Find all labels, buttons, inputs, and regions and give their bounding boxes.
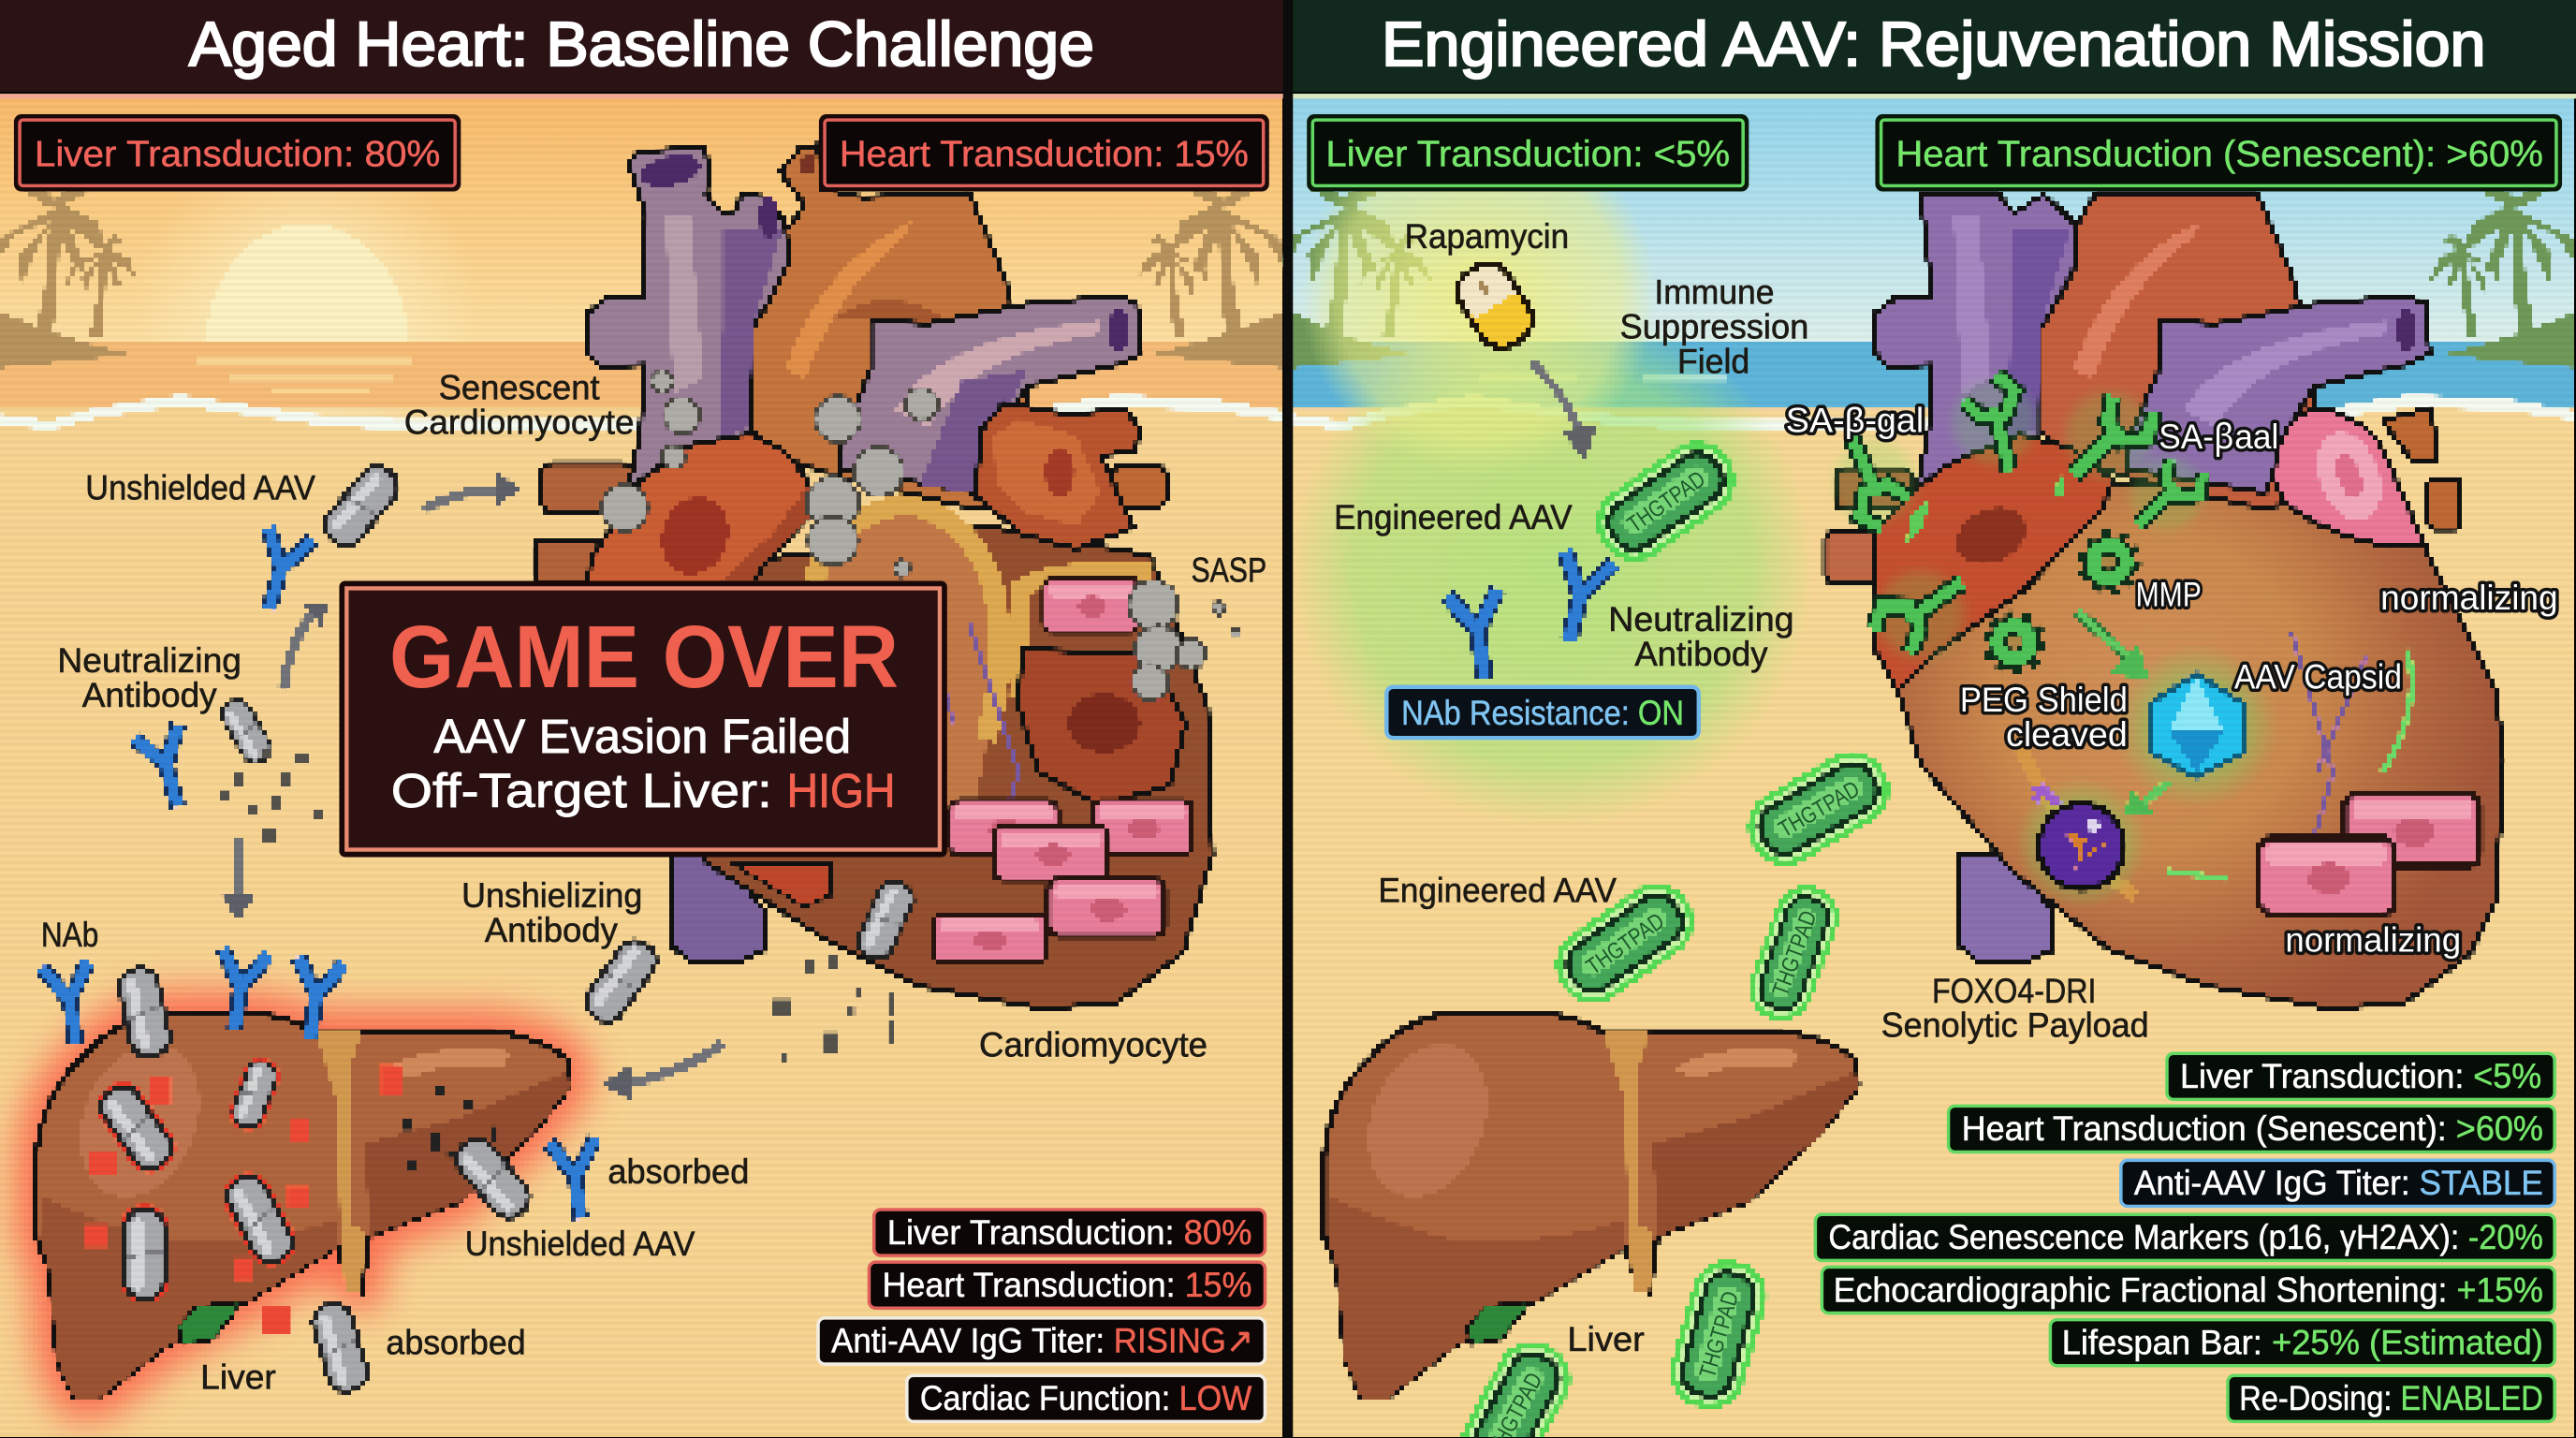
labels: right panel: Engineered AAV bbox=[1334, 498, 1573, 536]
labels: left panel: absorbed bbox=[386, 1323, 526, 1361]
badge: NAb resistance on bbox=[1386, 687, 1699, 738]
labels: heart annotations with halo: normalizing bbox=[2380, 579, 2558, 617]
icon: NAb antibodies on liver bbox=[42, 948, 603, 1222]
callout: game over: Off-Target Liver: bbox=[391, 764, 772, 817]
labels: right panel bbox=[1334, 217, 2149, 1358]
badge: NAb resistance on: NAb Resistance: ON bbox=[1401, 694, 1684, 732]
labels: heart annotations with halo: MMP bbox=[2136, 576, 2202, 614]
labels: right panel: Liver bbox=[1567, 1320, 1645, 1358]
labels: right panel: FOXO4-DRI bbox=[1932, 972, 2097, 1010]
stat panel: left readouts: Liver Transduction: 80% bbox=[887, 1213, 1251, 1252]
labels: left panel: Cardiomyocyte bbox=[404, 403, 634, 441]
icon: neutralizing antibodies deflected bbox=[1447, 550, 1615, 682]
tag: liver transduction 80% bbox=[17, 117, 459, 189]
arrow: heart to liver bbox=[601, 1044, 723, 1101]
arrow: down to liver bbox=[222, 838, 255, 922]
icon: engineered AAV capsules bbox=[1450, 432, 1898, 1438]
callout: game over: AAV Evasion Failed bbox=[433, 710, 851, 763]
stat panel: right readouts: Re-Dosing: ENABLED bbox=[2239, 1379, 2543, 1417]
icon: SASP smoke clouds bbox=[601, 370, 1240, 700]
labels: left panel: Antibody bbox=[82, 676, 217, 714]
callout: game over bbox=[342, 583, 944, 855]
tag: heart transduction 15%: Heart Transduction: 15% bbox=[840, 134, 1249, 174]
pill text: THGTPAD peptide labels: THGTPAD bbox=[1768, 907, 1822, 1000]
labels: heart annotations with halo bbox=[1786, 402, 2558, 959]
heading bar: aged heart: Aged Heart: Baseline Challenge bbox=[189, 10, 1094, 80]
arrow: capsid to payload bbox=[2123, 783, 2169, 815]
pill text: THGTPAD peptide labels: THGTPAD bbox=[1623, 466, 1710, 538]
tag: heart transduction 15% bbox=[822, 117, 1266, 189]
labels: right panel: Suppression bbox=[1620, 308, 1808, 346]
labels: heart annotations with halo: AAV Capsid bbox=[2234, 658, 2402, 697]
arrow: curved up bbox=[283, 601, 329, 690]
icon: AAV near heart bbox=[579, 876, 918, 1062]
tag: liver transduction under 5% bbox=[1310, 117, 1747, 189]
pill text: THGTPAD peptide labels bbox=[1484, 466, 1864, 1438]
labels: left panel: SASP bbox=[1191, 550, 1266, 589]
labels: right panel: Senolytic Payload bbox=[1881, 1006, 2149, 1045]
labels: heart annotations with halo: SA-β-gal bbox=[1786, 402, 1924, 440]
stat panel: right readouts: Heart Transduction (Senescent): >60% bbox=[1962, 1109, 2543, 1148]
labels: left panel: Neutralizing bbox=[57, 641, 242, 680]
labels: left panel: NAb bbox=[41, 916, 98, 954]
stat panel: right readouts: Echocardiographic Fractional Shortening: +15% bbox=[1834, 1270, 2543, 1309]
labels: left panel: Liver bbox=[200, 1357, 276, 1396]
arrow: rapamycin to engineered AAV bbox=[1531, 361, 1597, 462]
stat panel: right readouts: Lifespan Bar: +25% (Estimated) bbox=[2062, 1323, 2543, 1361]
labels: left panel: Unshielded AAV bbox=[465, 1225, 695, 1263]
illustration: healthy liver bbox=[1325, 1012, 1858, 1399]
callout: game over: GAME OVER bbox=[389, 608, 899, 707]
illustration: rejuvenated heart bbox=[1825, 192, 2504, 1009]
labels: left panel: Unshielded AAV bbox=[85, 469, 315, 507]
heading bar: engineered AAV bbox=[1293, 0, 2576, 98]
labels: heart annotations with halo: SA-ꞵaal bbox=[2159, 418, 2278, 457]
illustration: glowing infected liver bbox=[37, 1012, 570, 1399]
stat panel: right readouts bbox=[1815, 1053, 2554, 1421]
tag: heart transduction over 60% bbox=[1878, 117, 2559, 189]
illustration: aged heart bbox=[534, 144, 1212, 1009]
panel: aged heart scene background bbox=[0, 98, 1286, 1438]
icon: rapamycin capsule bbox=[1449, 255, 1542, 357]
labels: left panel: Senescent bbox=[439, 369, 600, 407]
labels: left panel bbox=[41, 369, 1266, 1396]
stat panel: right readouts: Liver Transduction: <5% bbox=[2180, 1057, 2541, 1095]
illustration: immune suppression field bbox=[1290, 118, 1815, 829]
stat panel: left readouts: Cardiac Function: LOW bbox=[920, 1379, 1252, 1417]
icon: FOXO4-DRI senolytic bomb bbox=[2016, 777, 2147, 909]
labels: left panel: Unshielizing bbox=[461, 876, 642, 915]
callout: game over: HIGH bbox=[787, 764, 896, 817]
stat panel: left readouts bbox=[818, 1210, 1265, 1421]
labels: heart annotations with halo: PEG Shield bbox=[1960, 681, 2128, 719]
icon: AAV capsid crystal bbox=[2115, 644, 2278, 809]
heading bar: aged heart bbox=[0, 0, 1283, 98]
labels: right panel: Field bbox=[1677, 342, 1749, 380]
stat panel: right readouts: Cardiac Senescence Markers (p16, γH2AX): -20% bbox=[1828, 1218, 2543, 1256]
labels: heart annotations with halo: cleaved bbox=[2006, 715, 2128, 754]
heading bar: engineered AAV: Engineered AAV: Rejuvenation Mission bbox=[1382, 10, 2485, 80]
stat panel: left readouts: Heart Transduction: 15% bbox=[882, 1266, 1251, 1304]
icon: absorbed AAV pills bbox=[88, 965, 536, 1396]
labels: right panel: Antibody bbox=[1634, 635, 1768, 673]
labels: left panel: Cardiomyocyte bbox=[979, 1026, 1208, 1064]
labels: right panel: Rapamycin bbox=[1405, 217, 1569, 256]
pill text: THGTPAD peptide labels: THGTPAD bbox=[1582, 908, 1669, 980]
labels: heart annotations with halo: normalizing bbox=[2285, 920, 2461, 959]
stat panel: left readouts: Anti-AAV IgG Titer: RISING↗ bbox=[831, 1322, 1253, 1360]
labels: right panel: Engineered AAV bbox=[1379, 872, 1617, 910]
arrow: MMP to capsid bbox=[2076, 611, 2149, 681]
labels: right panel: Immune bbox=[1654, 273, 1775, 312]
labels: right panel: Neutralizing bbox=[1608, 600, 1794, 638]
icon: antibody attacking broken AAV bbox=[134, 695, 324, 844]
panel: engineered AAV scene background bbox=[1281, 98, 2576, 1438]
arrow: AAV to heart bbox=[424, 472, 520, 509]
pill text: THGTPAD peptide labels: THGTPAD bbox=[1775, 776, 1864, 843]
pill text: THGTPAD peptide labels: THGTPAD bbox=[1695, 1288, 1744, 1381]
tag: liver transduction under 5%: Liver Transduction: <5% bbox=[1325, 134, 1730, 174]
tag: heart transduction over 60%: Heart Transduction (Senescent): >60% bbox=[1895, 134, 2543, 174]
panel divider bbox=[1283, 0, 1293, 1438]
tag: liver transduction 80%: Liver Transduction: 80% bbox=[35, 134, 440, 174]
labels: left panel: absorbed bbox=[607, 1152, 749, 1191]
stat panel: right readouts: Anti-AAV IgG Titer: STABLE bbox=[2134, 1164, 2543, 1202]
labels: left panel: Antibody bbox=[485, 911, 618, 949]
icon: unshielded AAV pill bbox=[318, 460, 405, 553]
icon: neutralizing antibody at top bbox=[247, 527, 313, 616]
icon: MMP scissor and wrench enzymes bbox=[1822, 365, 2203, 668]
